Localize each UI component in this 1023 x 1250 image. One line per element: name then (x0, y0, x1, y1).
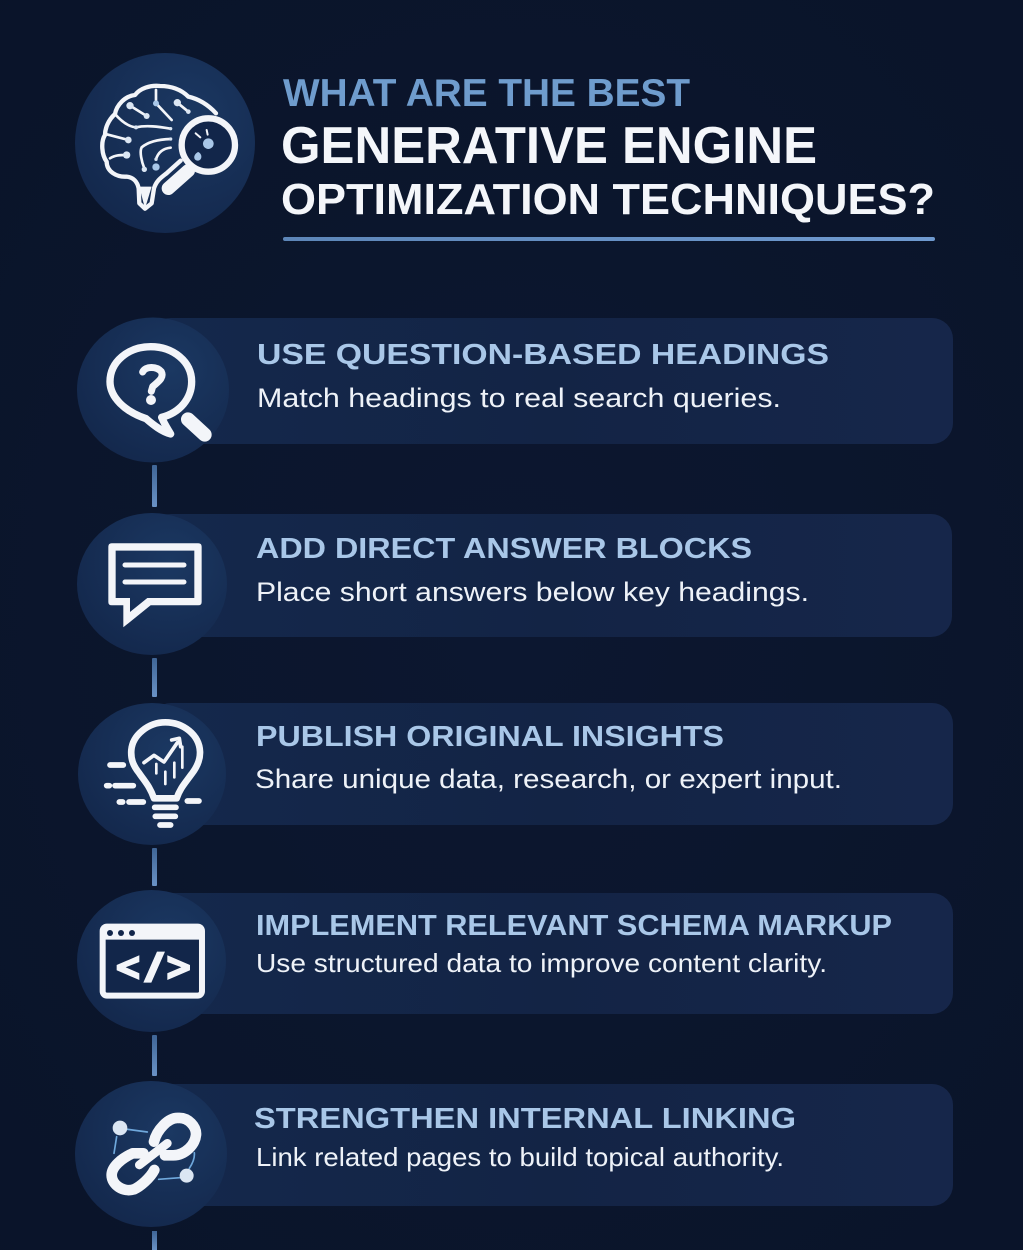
icon: chain link with nodes (112, 1118, 196, 1190)
heading: ADD DIRECT ANSWER BLOCKS (256, 533, 752, 565)
description: Use structured data to improve content clarity. (256, 948, 827, 978)
panel: direct answer blocks (77, 513, 952, 655)
icon: code window (101, 924, 204, 996)
heading: IMPLEMENT RELEVANT SCHEMA MARKUP (256, 910, 892, 942)
icon: light bulb with chart (107, 722, 200, 825)
heading: STRENGTHEN INTERNAL LINKING (254, 1103, 796, 1135)
description: Link related pages to build topical authority. (256, 1142, 784, 1172)
title: GENERATIVE ENGINE (281, 117, 817, 175)
panel: original insights (78, 703, 953, 845)
description: Share unique data, research, or expert input. (255, 764, 842, 794)
heading: PUBLISH ORIGINAL INSIGHTS (256, 721, 724, 753)
connector lines (152, 465, 157, 1250)
panel: question-based headings (77, 318, 953, 462)
panel: schema markup (77, 890, 953, 1032)
title underline (283, 237, 935, 241)
icon: question bubble with magnifier (110, 347, 205, 435)
title: OPTIMIZATION TECHNIQUES? (281, 175, 935, 224)
panel: internal linking (75, 1081, 953, 1227)
header icon: brain with magnifying glass (75, 53, 255, 233)
title: WHAT ARE THE BEST (283, 72, 690, 115)
heading: USE QUESTION-BASED HEADINGS (257, 339, 829, 371)
description: Place short answers below key headings. (256, 577, 809, 607)
description: Match headings to real search queries. (257, 383, 781, 413)
title (281, 72, 935, 224)
icon: speech bubble (108, 543, 202, 627)
